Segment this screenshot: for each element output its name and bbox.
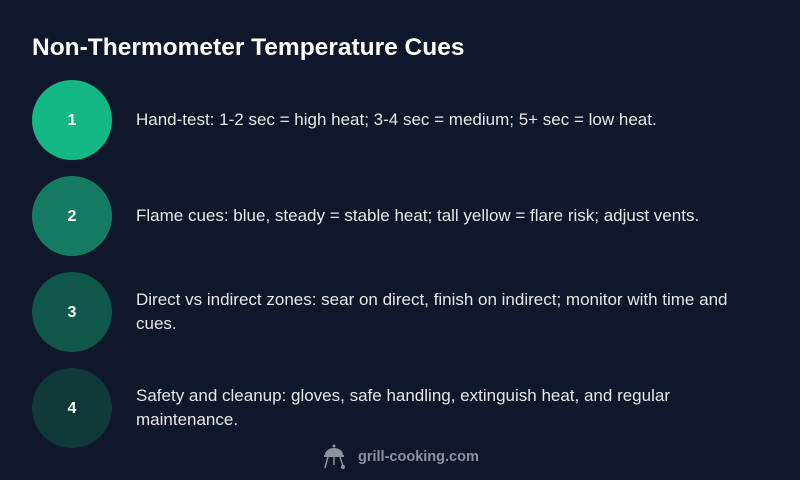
- step 1 circle: 1: [68, 112, 76, 129]
- step 2 circle: 2: [68, 208, 76, 225]
- step 3 circle: [32, 272, 112, 352]
- step 2 text: Flame cues: blue, steady = stable heat; tall yellow = flare risk; adjust vents.: [136, 206, 699, 225]
- step 1 text: Hand-test: 1-2 sec = high heat; 3-4 sec = medium; 5+ sec = low heat.: [136, 110, 657, 129]
- step 3 circle: 3: [68, 304, 76, 321]
- step 1 circle: [32, 80, 112, 160]
- step 3 text: [136, 290, 727, 333]
- step 4 circle: [32, 368, 112, 448]
- step 2 circle: [32, 176, 112, 256]
- icon: grill: [324, 444, 345, 469]
- step 4 text: [136, 386, 670, 429]
- step 4 text: maintenance.: [136, 410, 238, 429]
- step 4 text: Safety and cleanup: gloves, safe handling, extinguish heat, and regular: [136, 386, 670, 405]
- step 3 text: cues.: [136, 314, 177, 333]
- title: Non-Thermometer Temperature Cues: [32, 34, 464, 61]
- step 3 text: Direct vs indirect zones: sear on direct, finish on indirect; monitor with time and: [136, 290, 727, 309]
- step 4 circle: 4: [68, 400, 76, 417]
- brand text: grill-cooking.com: [358, 449, 479, 465]
- footer brand: [324, 444, 479, 469]
